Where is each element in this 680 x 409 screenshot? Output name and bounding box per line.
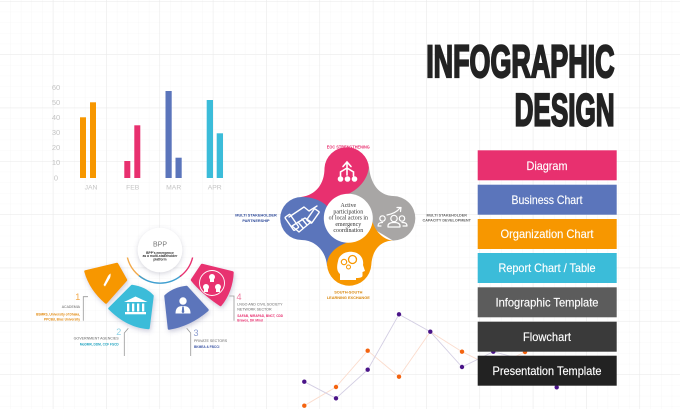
x axis labels: FEB (126, 184, 140, 192)
clover diagram (235, 144, 472, 300)
category list (478, 150, 617, 386)
label: capacity development: MULTI STAKEHOLDER (426, 214, 467, 218)
center text (324, 194, 373, 243)
card: academia (86, 264, 126, 302)
callout 2: government agencies: 2 (116, 327, 121, 337)
y axis labels: 20 (52, 143, 60, 152)
icon: hierarchy arrow (338, 162, 356, 181)
card: government (110, 286, 152, 328)
button: Presentation Template (478, 356, 617, 386)
label: south-south learning exchange (327, 291, 370, 300)
hub circle (138, 228, 182, 272)
button: Presentation Template: Presentation Template (492, 364, 602, 378)
title (426, 36, 615, 136)
y axis labels: 10 (52, 158, 60, 167)
center text: emergency (335, 222, 361, 228)
y axis labels (52, 83, 60, 182)
callout 3: private sectors: PRIVATE SECTORS (194, 339, 228, 343)
callout 4: civil society: 4 (236, 292, 242, 302)
label: south-south learning exchange: LEARNING EXCHANGE (327, 296, 370, 300)
label: multi stakeholder partnership: MULTI STAKEHOLDER (235, 214, 277, 218)
icon: handshake (285, 206, 319, 232)
callout 4: civil society: SAFAB, NIRAPAD, BNCT, CDD (237, 314, 284, 318)
icon: institution (124, 296, 148, 314)
label: EOC strengthening: EOC STRENGTHENING (327, 144, 370, 150)
y axis labels: 0 (54, 174, 58, 182)
center text: participation (333, 209, 363, 215)
icon: head with gears (337, 252, 365, 280)
center text: Active (340, 203, 357, 209)
bars: MAR (166, 91, 182, 178)
callout 2: government agencies (74, 327, 128, 356)
y axis labels: 50 (52, 98, 60, 107)
button: Flowchart (478, 322, 617, 352)
petal: blue (280, 197, 350, 266)
callout 1: academia: ACADEMIA (62, 305, 81, 309)
bars: JAN (80, 102, 96, 178)
icon: person (176, 297, 190, 314)
hub circle: platform (153, 258, 167, 262)
button: Diagram (478, 150, 617, 180)
x axis labels: JAN (85, 184, 98, 192)
button: Business Chart (478, 185, 617, 215)
bar chart (52, 83, 223, 192)
callout 3: private sectors (187, 328, 228, 356)
x axis labels: APR (208, 184, 222, 192)
button: Organization Chart: Organization Chart (500, 227, 594, 241)
callout 1: academia (36, 292, 88, 321)
hub circle: BPP (153, 242, 167, 248)
card: civil society (192, 265, 232, 305)
callout 2: government agencies: MoDMR, DDM, CCF FSCD (80, 343, 119, 347)
BPP fan diagram (36, 228, 284, 356)
card: private (166, 287, 208, 328)
callout 1: academia: 1 (75, 292, 80, 302)
callout 2: government agencies: GOVERNMENT AGENCIES (74, 337, 119, 341)
y axis labels: 40 (52, 113, 60, 122)
callout 4: civil society: NETWORK SECTOR (237, 307, 272, 311)
center text: of local actors in (329, 215, 368, 222)
callout 1: academia: PPCBd, Brac University (44, 317, 80, 321)
button: Diagram: Diagram (526, 159, 568, 173)
petal: gray (346, 166, 415, 241)
bars: APR (207, 100, 223, 178)
callout 1: academia: BSMRS, University of Dhaka, (36, 313, 80, 317)
icon: team growth (378, 208, 407, 227)
hub circle: as a multi-stakeholder (143, 254, 178, 258)
x axis labels: MAR (166, 184, 181, 192)
callout 4: civil society: Bravos, DK Mind (237, 318, 263, 322)
hub circle: BPP's emergence (146, 251, 174, 255)
button: Report Chart / Table: Report Chart / Table (498, 261, 596, 275)
orange series (302, 332, 527, 408)
center text: coordination (333, 228, 363, 234)
callout 3: private sectors: 3 (193, 328, 199, 338)
label: south-south learning exchange: SOUTH-SOUTH (334, 291, 363, 295)
button: Report Chart / Table (478, 253, 617, 283)
bars: FEB (124, 125, 140, 178)
purple series (302, 312, 559, 400)
line chart (302, 312, 559, 408)
y axis labels: 60 (52, 83, 60, 92)
callout 3: private sectors: BKMEA & FBCCI (194, 345, 219, 349)
label: capacity development: CAPACITY DEVELOPMENT (422, 219, 472, 223)
icon: pen (104, 274, 111, 286)
callout 4: civil society (229, 292, 284, 322)
button: Flowchart: Flowchart (523, 330, 572, 344)
label: multi stakeholder partnership: PARTNERSHIP (242, 219, 270, 223)
button: Infographic Template (478, 287, 617, 317)
petal: pink (301, 147, 369, 225)
button: Business Chart: Business Chart (512, 193, 583, 207)
button: Organization Chart (478, 219, 617, 249)
label: multi stakeholder partnership (235, 214, 277, 223)
button: Infographic Template: Infographic Template (496, 296, 599, 310)
petal: orange (327, 220, 393, 286)
label: capacity development (422, 214, 472, 223)
callout 4: civil society: LNGO AND CIVIL SOCIETY (237, 302, 283, 306)
icon: network people (200, 270, 224, 296)
x axis labels (85, 184, 222, 192)
y axis labels: 30 (52, 128, 60, 137)
arc ring (127, 258, 193, 283)
